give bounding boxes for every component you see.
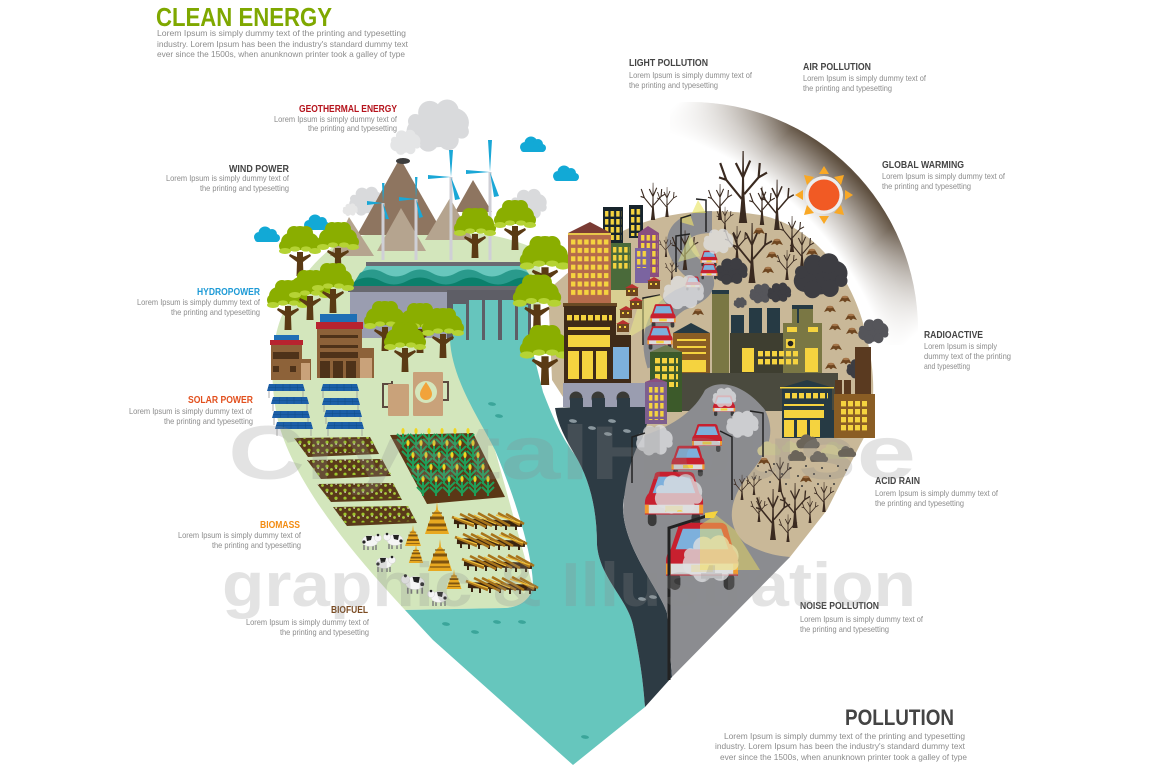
label: acid rain [875, 476, 999, 508]
polluted water [555, 404, 672, 707]
cows [362, 533, 447, 606]
crop rows [294, 437, 417, 526]
label: solar power: Lorem Ipsum is simply dummy text of [129, 406, 253, 416]
label: hydropower: HYDROPOWER [197, 287, 261, 298]
acid rain clouds [757, 434, 856, 462]
street lamps lower [632, 411, 763, 680]
haystacks [405, 502, 461, 589]
label: geothermal energy [274, 104, 398, 133]
fish [442, 402, 589, 739]
title: pollution: ever since the 1500s, when anunknown printer took a galley of type [720, 752, 967, 762]
label: biofuel: Lorem Ipsum is simply dummy text of [246, 617, 370, 627]
label: hydropower: the printing and typesetting [171, 307, 260, 317]
label: radioactive: Lorem Ipsum is simply [924, 341, 998, 351]
watermark: graphic & Illustration [222, 551, 916, 620]
label: noise pollution: the printing and typesetting [800, 624, 889, 634]
label: geothermal energy: GEOTHERMAL ENERGY [299, 104, 397, 115]
label: solar power: SOLAR POWER [188, 395, 254, 406]
sun [795, 166, 853, 224]
solar panels [267, 384, 364, 436]
biofuel tanks [383, 372, 448, 416]
factory [712, 290, 822, 373]
large brown building [563, 303, 631, 383]
lower road [623, 384, 790, 677]
radioactive sign [786, 339, 795, 348]
watermark: CrystalHouse [228, 411, 916, 496]
upper road [654, 222, 712, 365]
label: wind power: the printing and typesetting [200, 183, 289, 193]
tree stumps [692, 228, 858, 369]
label: light pollution: LIGHT POLLUTION [629, 58, 708, 69]
label: hydropower [137, 287, 261, 317]
lower city buildings [645, 323, 710, 424]
wheat rows [452, 513, 538, 594]
volcano smoke [343, 99, 547, 219]
label: wind power [166, 164, 290, 193]
label: global warming: the printing and typesetting [882, 181, 971, 191]
label: hydropower: Lorem Ipsum is simply dummy text of [137, 297, 261, 307]
black smoke [715, 253, 888, 378]
label: acid rain: Lorem Ipsum is simply dummy text of [875, 488, 999, 498]
label: acid rain: the printing and typesetting [875, 498, 964, 508]
river [405, 340, 645, 765]
title: pollution: POLLUTION [845, 705, 954, 730]
title: clean energy: industry. Lorem Ipsum has been the industry's standard dummy text [157, 39, 409, 49]
trees in middle [364, 301, 464, 372]
cars on road [645, 395, 738, 590]
small upper cars [647, 251, 717, 350]
hydropower dam [348, 262, 537, 340]
label: biofuel [246, 605, 370, 637]
title: clean energy [156, 2, 409, 59]
overpass [682, 373, 838, 411]
label: acid rain: ACID RAIN [875, 476, 920, 487]
polluted land [548, 211, 873, 640]
polluted haze halo [684, 102, 918, 330]
corn field [390, 428, 505, 504]
label: biomass [178, 520, 302, 550]
label: radioactive: RADIOACTIVE [924, 330, 983, 341]
title: pollution [715, 705, 967, 762]
label: noise pollution: Lorem Ipsum is simply dummy text of [800, 614, 924, 624]
title: clean energy: CLEAN ENERGY [156, 2, 332, 32]
title: clean energy: ever since the 1500s, when anunknown printer took a galley of type [157, 49, 405, 59]
city buildings upper [568, 205, 661, 332]
wind turbines [367, 140, 499, 260]
label: solar power: the printing and typesetting [164, 416, 253, 426]
label: air pollution: Lorem Ipsum is simply dummy text of [803, 73, 927, 83]
title: pollution: industry. Lorem Ipsum has been the industry's standard dummy text [715, 741, 966, 751]
label: geothermal energy: Lorem Ipsum is simply dummy text of [274, 114, 398, 124]
exhaust smoke [636, 229, 758, 582]
label: solar power [129, 395, 254, 426]
label: geothermal energy: the printing and typesetting [308, 123, 397, 133]
label: wind power: WIND POWER [229, 164, 290, 175]
right trees [513, 236, 570, 385]
label: biomass: the printing and typesetting [212, 540, 301, 550]
label: air pollution: AIR POLLUTION [803, 62, 871, 73]
acid rain drops [754, 463, 847, 487]
label: global warming: GLOBAL WARMING [882, 160, 964, 171]
brown buildings [270, 314, 374, 380]
grey fish [569, 419, 657, 601]
label: radioactive: dummy text of the printing [924, 351, 1011, 361]
blue clouds [254, 136, 579, 242]
street lamps upper [628, 199, 706, 345]
label: biomass: BIOMASS [260, 520, 300, 531]
label: air pollution [803, 62, 927, 93]
watermark [222, 411, 916, 620]
label: biofuel: BIOFUEL [331, 605, 368, 616]
title: pollution: Lorem Ipsum is simply dummy text of the printing and typesetting [724, 731, 965, 741]
trees behind dam [454, 200, 536, 258]
mountains [330, 158, 492, 256]
right buildings [780, 347, 875, 438]
label: radioactive: and typesetting [924, 361, 970, 371]
label: global warming: Lorem Ipsum is simply dummy text of [882, 171, 1006, 181]
label: radioactive [924, 330, 1011, 371]
label: biofuel: the printing and typesetting [280, 627, 369, 637]
label: air pollution: the printing and typesetting [803, 83, 892, 93]
tree cluster left [267, 222, 359, 330]
label: light pollution: the printing and typesetting [629, 80, 718, 90]
label: noise pollution [800, 601, 924, 634]
label: noise pollution: NOISE POLLUTION [800, 601, 879, 612]
bridge with arches [563, 383, 647, 408]
clean energy land [272, 230, 545, 610]
label: light pollution [629, 58, 753, 90]
label: biomass: Lorem Ipsum is simply dummy text of [178, 530, 302, 540]
label: wind power: Lorem Ipsum is simply dummy text of [166, 173, 290, 183]
label: light pollution: Lorem Ipsum is simply dummy text of [629, 70, 753, 80]
dead forest [641, 151, 814, 283]
label: global warming [882, 160, 1006, 191]
acid rain trees [734, 457, 834, 542]
title: clean energy: Lorem Ipsum is simply dummy text of the printing and typesetting [157, 28, 406, 38]
